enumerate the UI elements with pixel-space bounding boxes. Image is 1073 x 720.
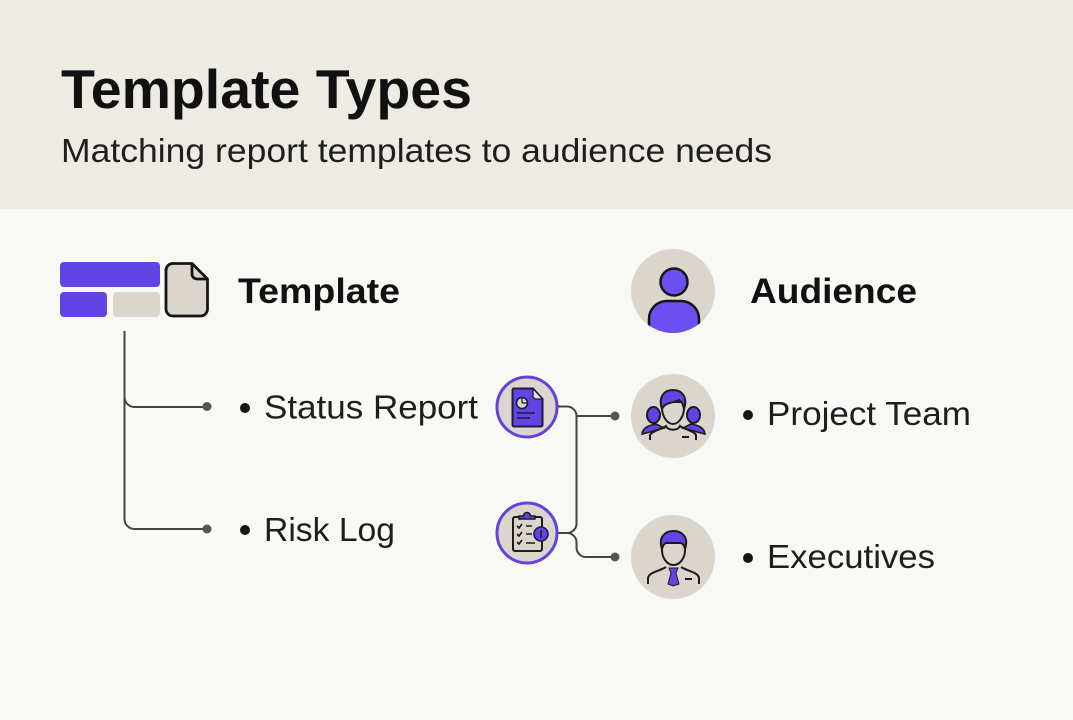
heading: template: Template bbox=[238, 272, 400, 311]
list item: executives: Executives bbox=[767, 539, 935, 576]
title: Template Types bbox=[61, 58, 472, 120]
heading: audience: Audience bbox=[750, 272, 917, 311]
icon: risk log clipboard bbox=[497, 503, 557, 563]
icon: executive bbox=[631, 515, 715, 599]
icon: project team bbox=[631, 374, 715, 458]
connector: template tree bbox=[124, 331, 212, 534]
header band bbox=[0, 0, 1073, 209]
subtitle: Matching report templates to audience needs bbox=[61, 133, 772, 170]
list item: project team: Project Team bbox=[767, 396, 971, 433]
icon: audience bbox=[631, 249, 715, 340]
list item: risk log: Risk Log bbox=[264, 512, 395, 549]
icon: status report document bbox=[497, 377, 557, 437]
icon: template layout bbox=[60, 262, 208, 317]
list item: status report: Status Report bbox=[264, 390, 479, 426]
connector: templates to audiences bbox=[558, 406, 620, 562]
